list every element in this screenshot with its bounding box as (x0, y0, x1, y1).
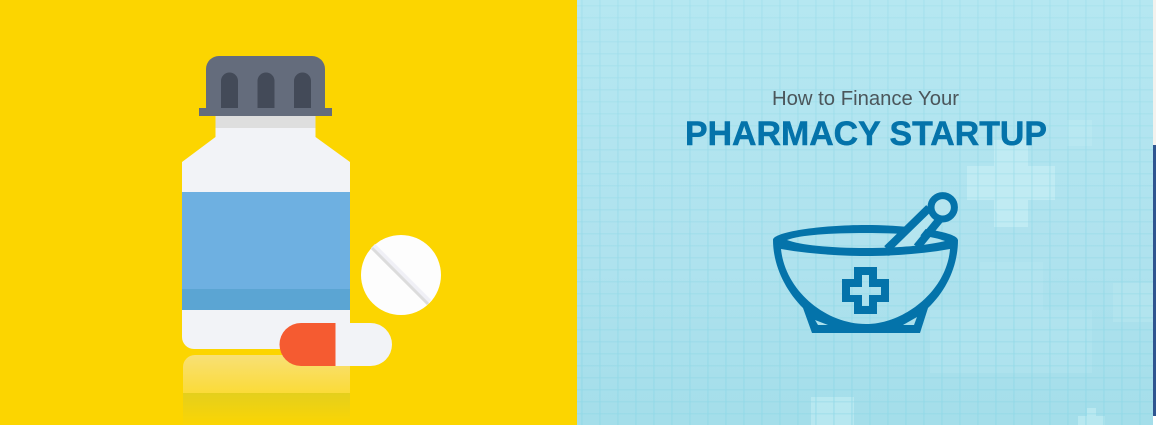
right edge strip (1153, 0, 1156, 425)
panel: yellow background (0, 0, 577, 425)
panel: light blue background (577, 0, 1153, 425)
icon: mortar and pestle (773, 196, 958, 333)
neck shadow (216, 116, 316, 128)
mortar bowl and base (773, 225, 958, 333)
pestle (887, 196, 954, 250)
bottle cap (199, 56, 332, 116)
faint cross decoration (811, 120, 1153, 425)
medical cross (842, 267, 889, 314)
icon: capsule (280, 323, 392, 366)
icon: round tablet (361, 235, 441, 315)
illustration: medicine bottle (182, 56, 350, 425)
subtitle: How to Finance Your (772, 88, 959, 110)
title: PHARMACY STARTUP (685, 115, 1047, 153)
bottle reflection (183, 355, 350, 425)
bottle label (182, 192, 350, 310)
bottle body (182, 116, 350, 349)
